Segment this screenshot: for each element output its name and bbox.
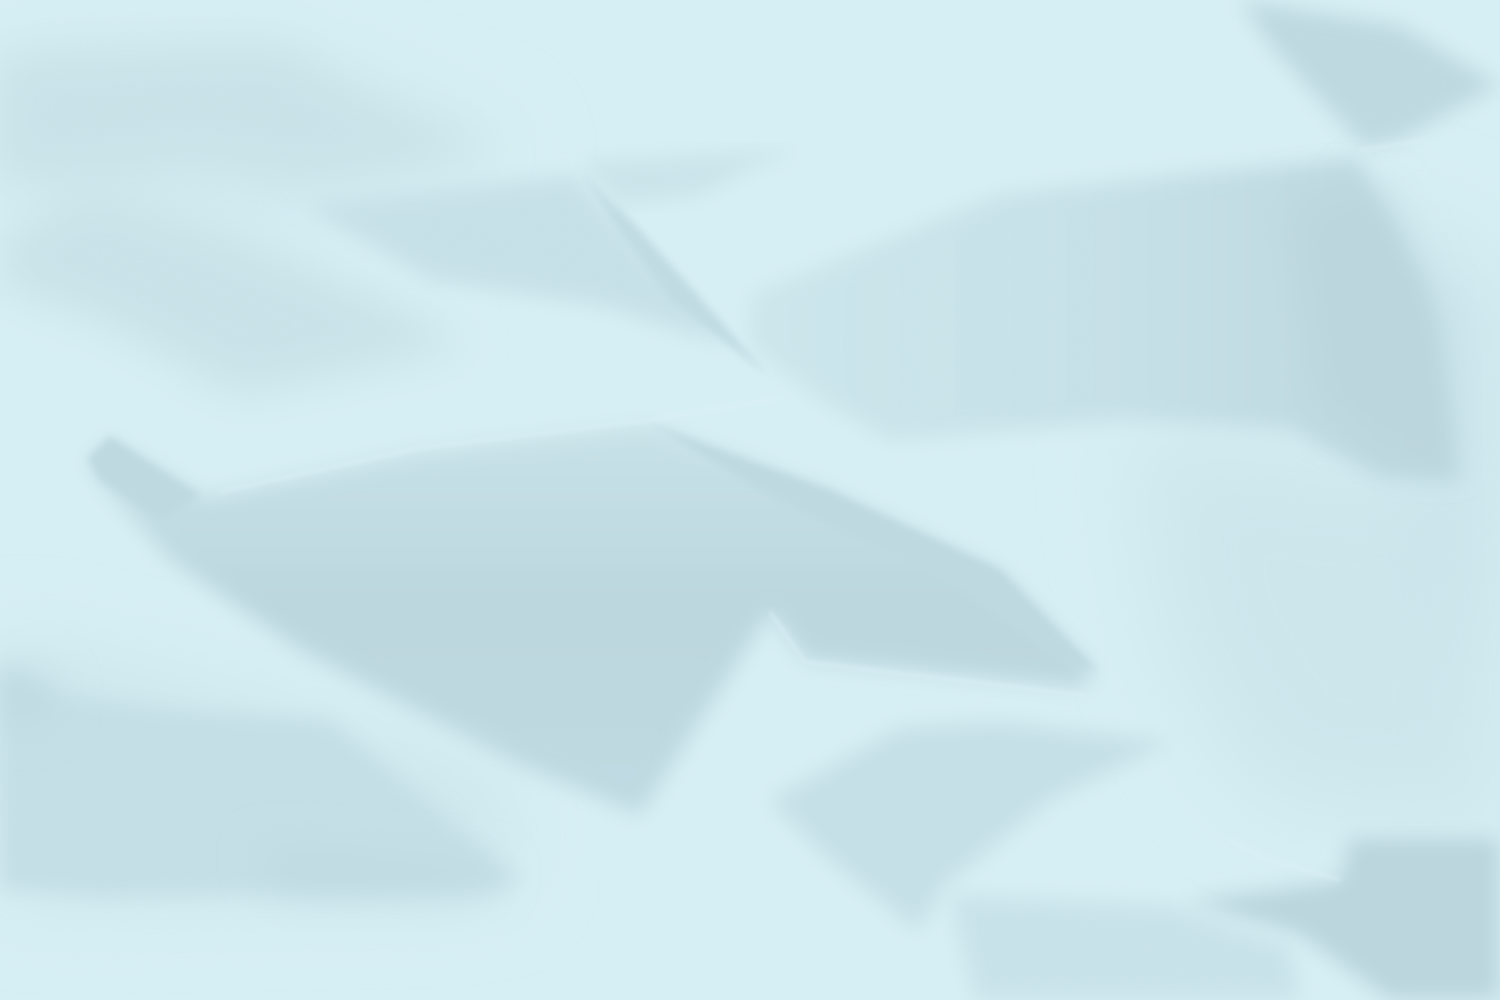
fold shadow: crisp upper left edges bbox=[582, 172, 768, 375]
fold shadow: central crease sharp top edge bbox=[88, 424, 1098, 672]
fold shadow: central dark crease bbox=[90, 425, 1095, 815]
fold shadow: top right corner bbox=[1240, 0, 1500, 148]
fold shadow: lower left bbox=[0, 665, 520, 897]
fold shadow: right side bbox=[750, 158, 1460, 480]
fold shadow: deep right panel bbox=[1290, 190, 1450, 460]
fold shadow: bottom right bbox=[1185, 838, 1500, 1000]
fold shadow: bottom centre bbox=[950, 895, 1300, 1000]
fold shadow: lower left dark patch bbox=[0, 660, 500, 890]
fold shadow: lower middle bbox=[770, 722, 1170, 930]
fold edges: thin bright creases bbox=[220, 140, 1425, 880]
fold shadow: upper left diagonal panel bbox=[305, 175, 730, 345]
fold shadows: upper left bbox=[0, 50, 500, 395]
fold shadow: small wedge at centre top bbox=[580, 150, 800, 205]
